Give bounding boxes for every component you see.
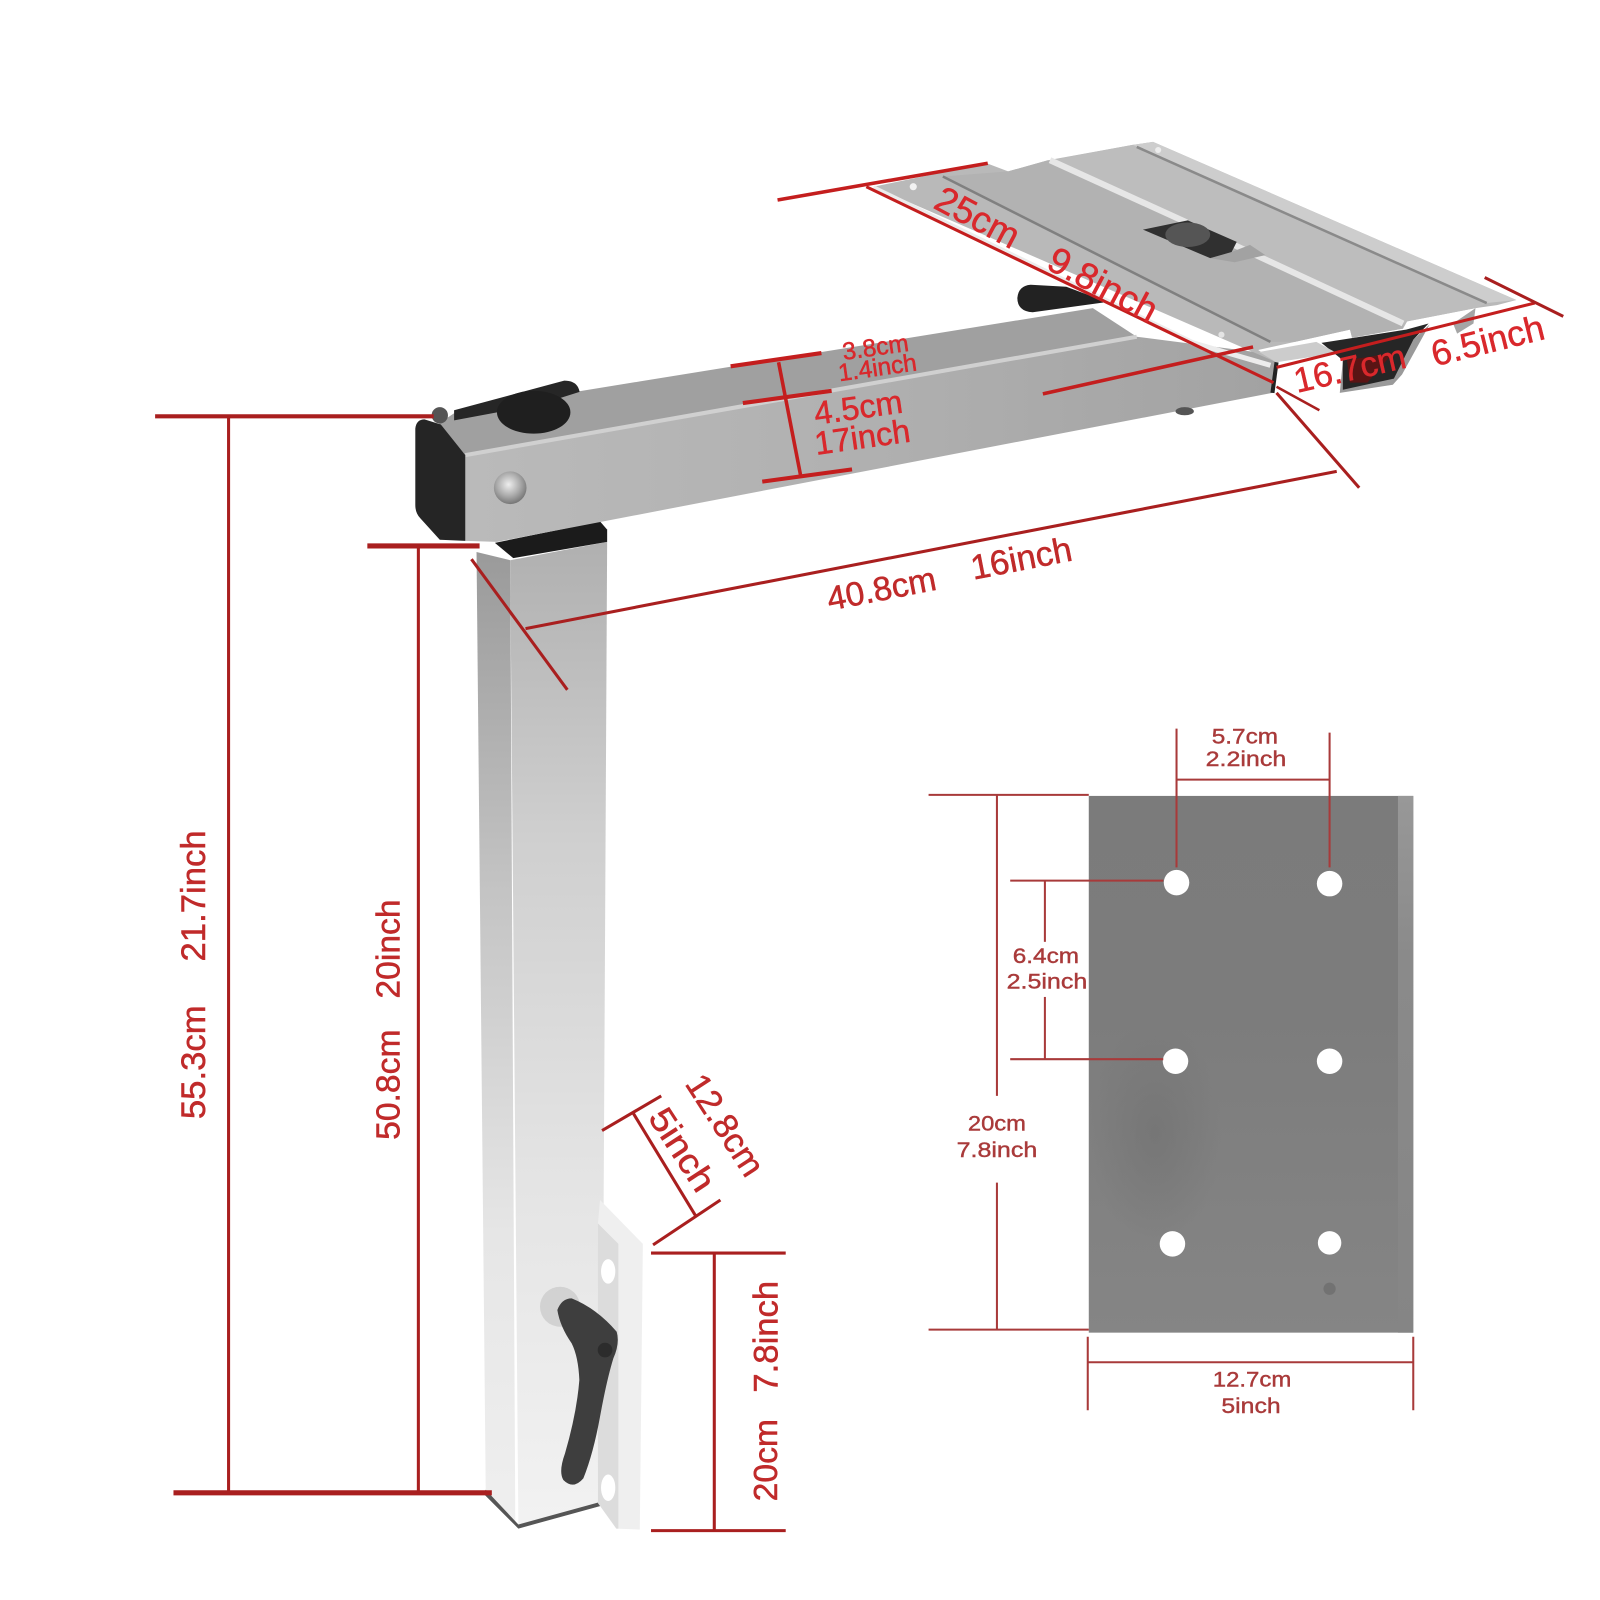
label 7.8inch: 7.8inch [747,1281,785,1393]
height dimension 50.8cm [367,546,480,1493]
label 40.8cm: 40.8cm [824,561,939,618]
label 4.5cm: 4.5cm [812,383,905,432]
plate [1089,796,1413,1333]
product: vertical column [477,521,607,1529]
product: table top plate [873,142,1516,393]
plate dimension 5.7cm [1177,725,1330,867]
label 16.7cm: 16.7cm [1290,338,1410,401]
label 5inch: 5inch [641,1101,723,1199]
flange end block [1259,342,1337,362]
arm front face [465,337,1277,542]
clamp red tint [1347,353,1393,383]
label 12.7cm: 12.7cm [1213,1368,1291,1392]
label 1.4inch: 1.4inch [837,350,918,387]
centre highlight stripe [1050,160,1187,222]
plate dimension 12.7cm [1088,1337,1413,1418]
label 12.8cm: 12.8cm [678,1067,771,1184]
underside stud [1176,407,1194,415]
plate dimension 20cm [929,795,1089,1330]
right silver piece [1453,308,1476,334]
label 2.2inch: 2.2inch [1206,747,1286,771]
plate blemish [1323,1283,1336,1295]
bracket dimension 20cm [651,1253,786,1531]
plate dark patch [1089,1020,1221,1245]
plate base [873,142,1516,362]
clamp dark inner [1321,323,1429,390]
label 55.3cm: 55.3cm [175,1005,213,1119]
panel: base plate [1089,796,1413,1333]
label 3.8cm: 3.8cm [841,330,910,366]
label 21.7inch: 21.7inch [175,830,213,961]
hole 6 [1318,1231,1341,1255]
plate right edge highlight [1398,796,1413,1333]
label 50.8cm: 50.8cm [370,1030,407,1140]
label 17inch: 17inch [812,412,912,462]
label 25cm: 25cm [928,178,1027,257]
column base shadow [484,1490,600,1529]
label 20cm: 20cm [748,1419,785,1501]
front flange highlight [873,188,1270,365]
label 16inch: 16inch [968,531,1075,588]
product: horizontal arm [415,308,1277,542]
outer rail [1133,142,1516,303]
plate dimension 6.4cm [1007,881,1163,1059]
arm section dimensions [731,330,918,482]
label 20cm: 20cm [968,1111,1026,1135]
end edge [1272,362,1277,393]
centre clamp [1143,220,1237,258]
label 20inch: 20inch [370,899,407,999]
centre clamp knob [1165,222,1210,247]
product: rear knob [1017,285,1107,312]
hole 5 [1160,1231,1185,1257]
clamp plate [454,381,580,420]
table width dimension 16.7cm [1277,278,1563,410]
column right face [510,542,607,1524]
column left face [477,552,515,1526]
height dimension 55.3cm [155,416,492,1493]
label 5.7cm: 5.7cm [1212,725,1278,749]
label 6.4cm: 6.4cm [1013,944,1079,968]
raised centre panel [1050,145,1487,323]
label 7.8inch: 7.8inch [957,1138,1037,1162]
column top cap [495,521,607,558]
groove lines [943,177,1270,342]
arm end cap [415,419,465,541]
hole 4 [1317,1048,1342,1074]
label 9.8inch: 9.8inch [1041,239,1165,331]
lower panel [943,160,1403,342]
arm top face [439,308,1137,455]
arm ridge highlight [465,337,1137,455]
small pin [432,407,448,423]
hole 2 [1317,871,1342,896]
icon: locking handle [540,1287,618,1485]
bracket dimension 12.8cm [602,1067,771,1245]
hole 3 [1163,1048,1188,1074]
clamp silver body [1340,324,1430,393]
label 2.5inch: 2.5inch [1007,970,1087,994]
side bolt [494,471,527,504]
rivets [910,183,917,190]
arm length dimension 40.8cm [471,393,1359,690]
product: mounting bracket [598,1200,643,1530]
hole 1 [1164,870,1189,895]
table length dimension 25cm [778,163,1273,394]
knob [497,391,570,434]
label 5inch: 5inch [1221,1394,1281,1418]
label 6.5inch: 6.5inch [1427,307,1548,374]
product: end clamp under plate [1321,308,1476,393]
clamp shadow [1210,245,1265,262]
